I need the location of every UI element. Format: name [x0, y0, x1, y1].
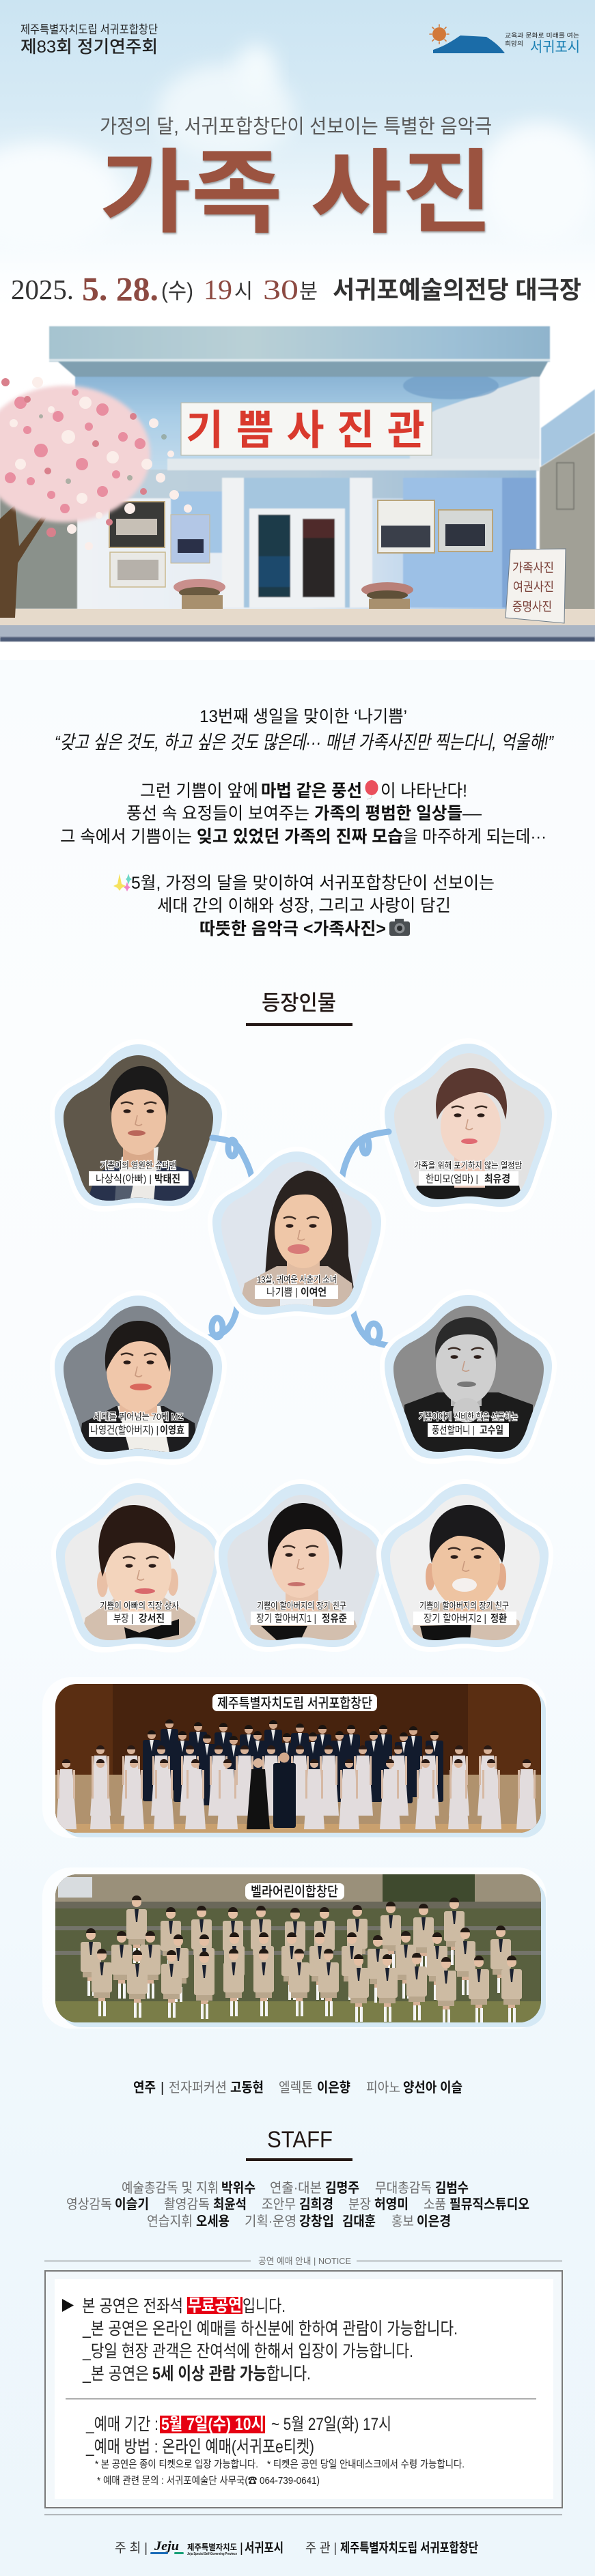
staff credits: 예술총감독 및 지휘 [122, 2180, 219, 2196]
performers credit: | [161, 2080, 164, 2095]
cast card: 최유경: 가족을 위해 포기하지 않는 열정맘 [414, 1160, 522, 1171]
staff credits: 촬영감독 [164, 2196, 210, 2212]
cast card: 정환: 장기 할아버지2 | [424, 1613, 486, 1625]
logo: Jeju [150, 2539, 237, 2556]
staff credits: 필뮤직스튜디오 [449, 2196, 529, 2212]
sidewalk [0, 609, 595, 642]
staff credits: 박위수 [221, 2180, 255, 2196]
icon: sparkles [113, 874, 132, 891]
staff credits: 연출·대본 [270, 2180, 322, 2196]
logo: Seogwipo city: 희망의 [505, 40, 523, 47]
ticketing information: _예매 기간 : [85, 2415, 158, 2434]
staff credits [66, 2180, 529, 2229]
cast card: 이영효: 세대를 뛰어넘는 70대 MZ [94, 1412, 183, 1422]
neighbouring buildings [0, 389, 595, 611]
date and venue: 분 [299, 281, 318, 303]
group photo: Bella children's choir [42, 1867, 546, 2029]
notice rules: 합니다. [266, 2364, 311, 2384]
label: children's choir name: 벨라어린이합창단 [251, 1884, 338, 1900]
notice box [45, 2271, 562, 2508]
sandwich board: 가족사진 [512, 561, 554, 575]
building body [49, 326, 550, 610]
date and venue: 2025. [11, 274, 74, 305]
staff credits: 홍보 [391, 2214, 414, 2229]
notice rules: 본 공연은 전좌석 [82, 2297, 183, 2316]
staff credits: 허영미 [374, 2196, 409, 2212]
sandwich board: 증명사진 [512, 600, 552, 614]
cast card: 강서진 [51, 1478, 224, 1652]
cast card: 정유준: 정유준 [322, 1613, 347, 1625]
synopsis: paragraph two: 그 속에서 기쁨이는 [60, 827, 192, 846]
synopsis: paragraph three: 세대 간의 이해와 성장, 그리고 사랑이 담긴 [157, 896, 451, 915]
cast card: 박태진: 기쁨이의 영원한 슈퍼맨 [100, 1160, 176, 1171]
staff credits: 오세용 [196, 2214, 230, 2229]
cast card: 박태진 [55, 1044, 222, 1206]
cast card: 고수일: 고수일 [480, 1425, 503, 1436]
staff credits: 이은경 [417, 2214, 451, 2229]
header: organizer and concert number: 제주특별자치도립 서귀포합창단 [20, 23, 158, 36]
performers credit: 양선아 이슬 [403, 2080, 462, 2095]
synopsis: birthday heading: 13번째 생일을 맞이한 ‘나기쁨’ [199, 707, 407, 726]
sandwich board: 여권사진 [513, 580, 554, 594]
logo: Jeju: Jeju [154, 2539, 179, 2553]
shop sign: 기쁨사진관 [186, 407, 425, 453]
staff credits: 김범수 [435, 2180, 469, 2196]
performers credit: 고동현 [230, 2080, 264, 2095]
staff credits: 이슬기 [115, 2196, 149, 2212]
cast card: 박태진: 박태진 [154, 1173, 180, 1185]
label: choir name: 제주특별자치도립 서귀포합창단 [217, 1695, 372, 1711]
performers credit: 피아노 [366, 2080, 400, 2095]
staff credits: 영상감독 [66, 2196, 112, 2212]
footer: host and organizer: | [240, 2541, 243, 2556]
staff credits: 기획·운영 [245, 2214, 296, 2229]
ticketing information: 5월 7일(수) 10시 [161, 2415, 264, 2434]
cast card: 강서진: 강서진 [139, 1613, 165, 1625]
date and venue: 서귀포예술의전당 대극장 [333, 276, 581, 304]
date and venue [11, 270, 581, 308]
date and venue: 30 [263, 274, 299, 305]
ticketing information: * 예매 관련 문의 : 서귀포예술단 사무국(☎ 064-739-0641) [97, 2475, 320, 2487]
date and venue: 5. 28. [82, 270, 158, 308]
cast card: 강서진: 부장 | [113, 1613, 133, 1625]
cast card: 정환: 정환 [490, 1613, 507, 1625]
notice rules [82, 2296, 458, 2384]
staff credits: 분장 [348, 2196, 371, 2212]
title: 가족 사진 [100, 143, 493, 244]
cast card: 이여언: 13살, 귀여운 사춘기 소녀 [257, 1274, 337, 1285]
cast card: 최유경: 한미모(엄마) | [426, 1173, 478, 1185]
cast card: 정유준 [215, 1479, 387, 1652]
cast card: 고수일: 풍선할머니 | [432, 1425, 475, 1436]
staff credits: 김대훈 [342, 2214, 376, 2229]
cast card: 이영효: 이영효 [160, 1425, 184, 1436]
synopsis: paragraph two: 을 마주하게 되는데··· [403, 827, 546, 846]
notice rules: _본 공연은 온라인 예매를 하신분에 한하여 관람이 가능합니다. [82, 2319, 458, 2338]
staff credits: 강창입 [299, 2214, 334, 2229]
notice rules: 입니다. [243, 2297, 286, 2316]
synopsis: paragraph two: 잊고 있었던 가족의 진짜 모습 [197, 827, 403, 846]
cast card: 최유경 [385, 1044, 552, 1207]
heading: staff: STAFF [267, 2127, 333, 2153]
logo: Jeju: Jeju Special Self-Governing Province [187, 2552, 237, 2556]
header: organizer and concert number [20, 23, 158, 57]
synopsis: paragraph three [131, 874, 495, 939]
group photo: Seogwipo choir [42, 1677, 546, 1838]
connector arrows between cast [197, 1132, 398, 1347]
synopsis: paragraph three: 5월, 가정의 달을 맞이하여 서귀포합창단이 선보이는 [131, 874, 495, 893]
cast card: 이여언: 나기쁨 | [266, 1287, 298, 1298]
subtitle: 가정의 달, 서귀포합창단이 선보이는 특별한 음악극 [100, 115, 492, 138]
cherry blossom tree [0, 377, 192, 618]
notice header: 공연 예매 안내 | NOTICE [258, 2256, 351, 2266]
footer: host and organizer: 제주특별자치도립 서귀포합창단 [340, 2541, 478, 2556]
synopsis: paragraph two: — [462, 804, 482, 823]
footer: host and organizer: 주 관 | [305, 2541, 337, 2556]
staff credits: 김희경 [299, 2196, 333, 2212]
footer: host and organizer: 서귀포시 [245, 2541, 283, 2556]
notice rules: _당일 현장 관객은 잔여석에 한해서 입장이 가능합니다. [82, 2342, 413, 2361]
performers credit: 이은향 [317, 2080, 350, 2095]
performers credit: 엘렉톤 [279, 2080, 313, 2095]
logo: Seogwipo city: 서귀포시 [530, 40, 580, 55]
performers credit: 연주 [133, 2080, 156, 2095]
flower boxes [174, 579, 413, 613]
cast card: 이영효: 나영건(할아버지) | [90, 1425, 158, 1436]
synopsis: paragraph two: 풍선 속 요정들이 보여주는 [126, 804, 309, 823]
synopsis text [55, 707, 554, 939]
staff credits: 조안무 [262, 2196, 296, 2212]
icon: balloon [365, 780, 378, 799]
footer: host and organizer: 주 최 | [115, 2541, 148, 2556]
logo: Seogwipo city [430, 25, 580, 55]
illustration: photo studio building [0, 326, 595, 642]
icon: camera [389, 919, 410, 936]
icon: triangle bullet [62, 2299, 74, 2312]
synopsis: paragraph two: 가족의 평범한 일상들 [314, 804, 462, 823]
staff credits: 소품 [424, 2197, 446, 2212]
wall photos [109, 500, 493, 587]
performers credit: 전자퍼커션 [169, 2080, 227, 2095]
logo: Seogwipo city: 교육과 문화로 미래를 여는 [505, 31, 579, 39]
sandwich board [506, 549, 566, 623]
cast card: 박태진: 나상식(아빠) | [96, 1173, 152, 1185]
cast card: 이영효 [55, 1296, 222, 1459]
synopsis: paragraph three: 따뜻한 음악극 <가족사진> [199, 919, 386, 939]
staff credits: 김명주 [325, 2180, 359, 2196]
heading: cast: 등장인물 [262, 991, 336, 1015]
notice rules: 5세 이상 관람 가능 [152, 2364, 266, 2384]
ticketing information [85, 2415, 465, 2487]
cast card: 고수일: 기쁨이에게 신비한 힘을 선물하는 [419, 1412, 518, 1422]
heading: staff [246, 2127, 352, 2161]
performers credit [133, 2080, 462, 2095]
footer: host and organizer [115, 2539, 478, 2556]
synopsis: paragraph two: 이 나타난다! [380, 782, 467, 801]
cast card: 강서진: 기쁨이 아빠의 직장 상사 [100, 1601, 179, 1611]
date and venue: (수) [161, 278, 193, 303]
cast card: 최유경: 최유경 [484, 1173, 510, 1185]
ticketing information: _예매 방법 : 온라인 예매(서귀포e티켓) [85, 2437, 314, 2457]
synopsis: paragraph two: 마법 같은 풍선 [261, 782, 362, 801]
cast card: 고수일 [384, 1295, 552, 1459]
logo: Jeju: 제주특별자치도 [187, 2542, 237, 2552]
date and venue: 시 [234, 281, 253, 303]
cast card: 정환 [376, 1479, 553, 1652]
synopsis: paragraph two [60, 782, 546, 846]
cast card: 정환: 기쁨이 할아버지의 장기 친구 [419, 1601, 509, 1611]
cast card: 이여언 [212, 1151, 381, 1315]
staff credits: 연습지휘 [147, 2214, 193, 2229]
cast card: 정유준: 장기 할아버지1 | [256, 1613, 316, 1625]
heading: cast [246, 991, 352, 1026]
ticketing information: * 본 공연은 종이 티켓으로 입장 가능합니다. [95, 2459, 258, 2470]
header: organizer and concert number: 제83회 정기연주회 [20, 38, 158, 57]
ticketing information: ~ 5월 27일(화) 17시 [271, 2415, 391, 2434]
date and venue: 19 [204, 274, 232, 305]
ticketing information: * 티켓은 공연 당일 안내데스크에서 수령 가능합니다. [267, 2459, 465, 2470]
cast card: 정유준: 기쁨이 할아버지의 장기 친구 [257, 1601, 346, 1611]
staff credits: 무대총감독 [375, 2180, 432, 2196]
notice rules: 무료공연 [188, 2296, 242, 2315]
cast card: 이여언: 이여언 [301, 1287, 327, 1298]
notice rules: _본 공연은 [82, 2364, 149, 2384]
synopsis: paragraph two: 그런 기쁨이 앞에 [140, 782, 258, 801]
staff credits: 최윤석 [213, 2196, 247, 2212]
